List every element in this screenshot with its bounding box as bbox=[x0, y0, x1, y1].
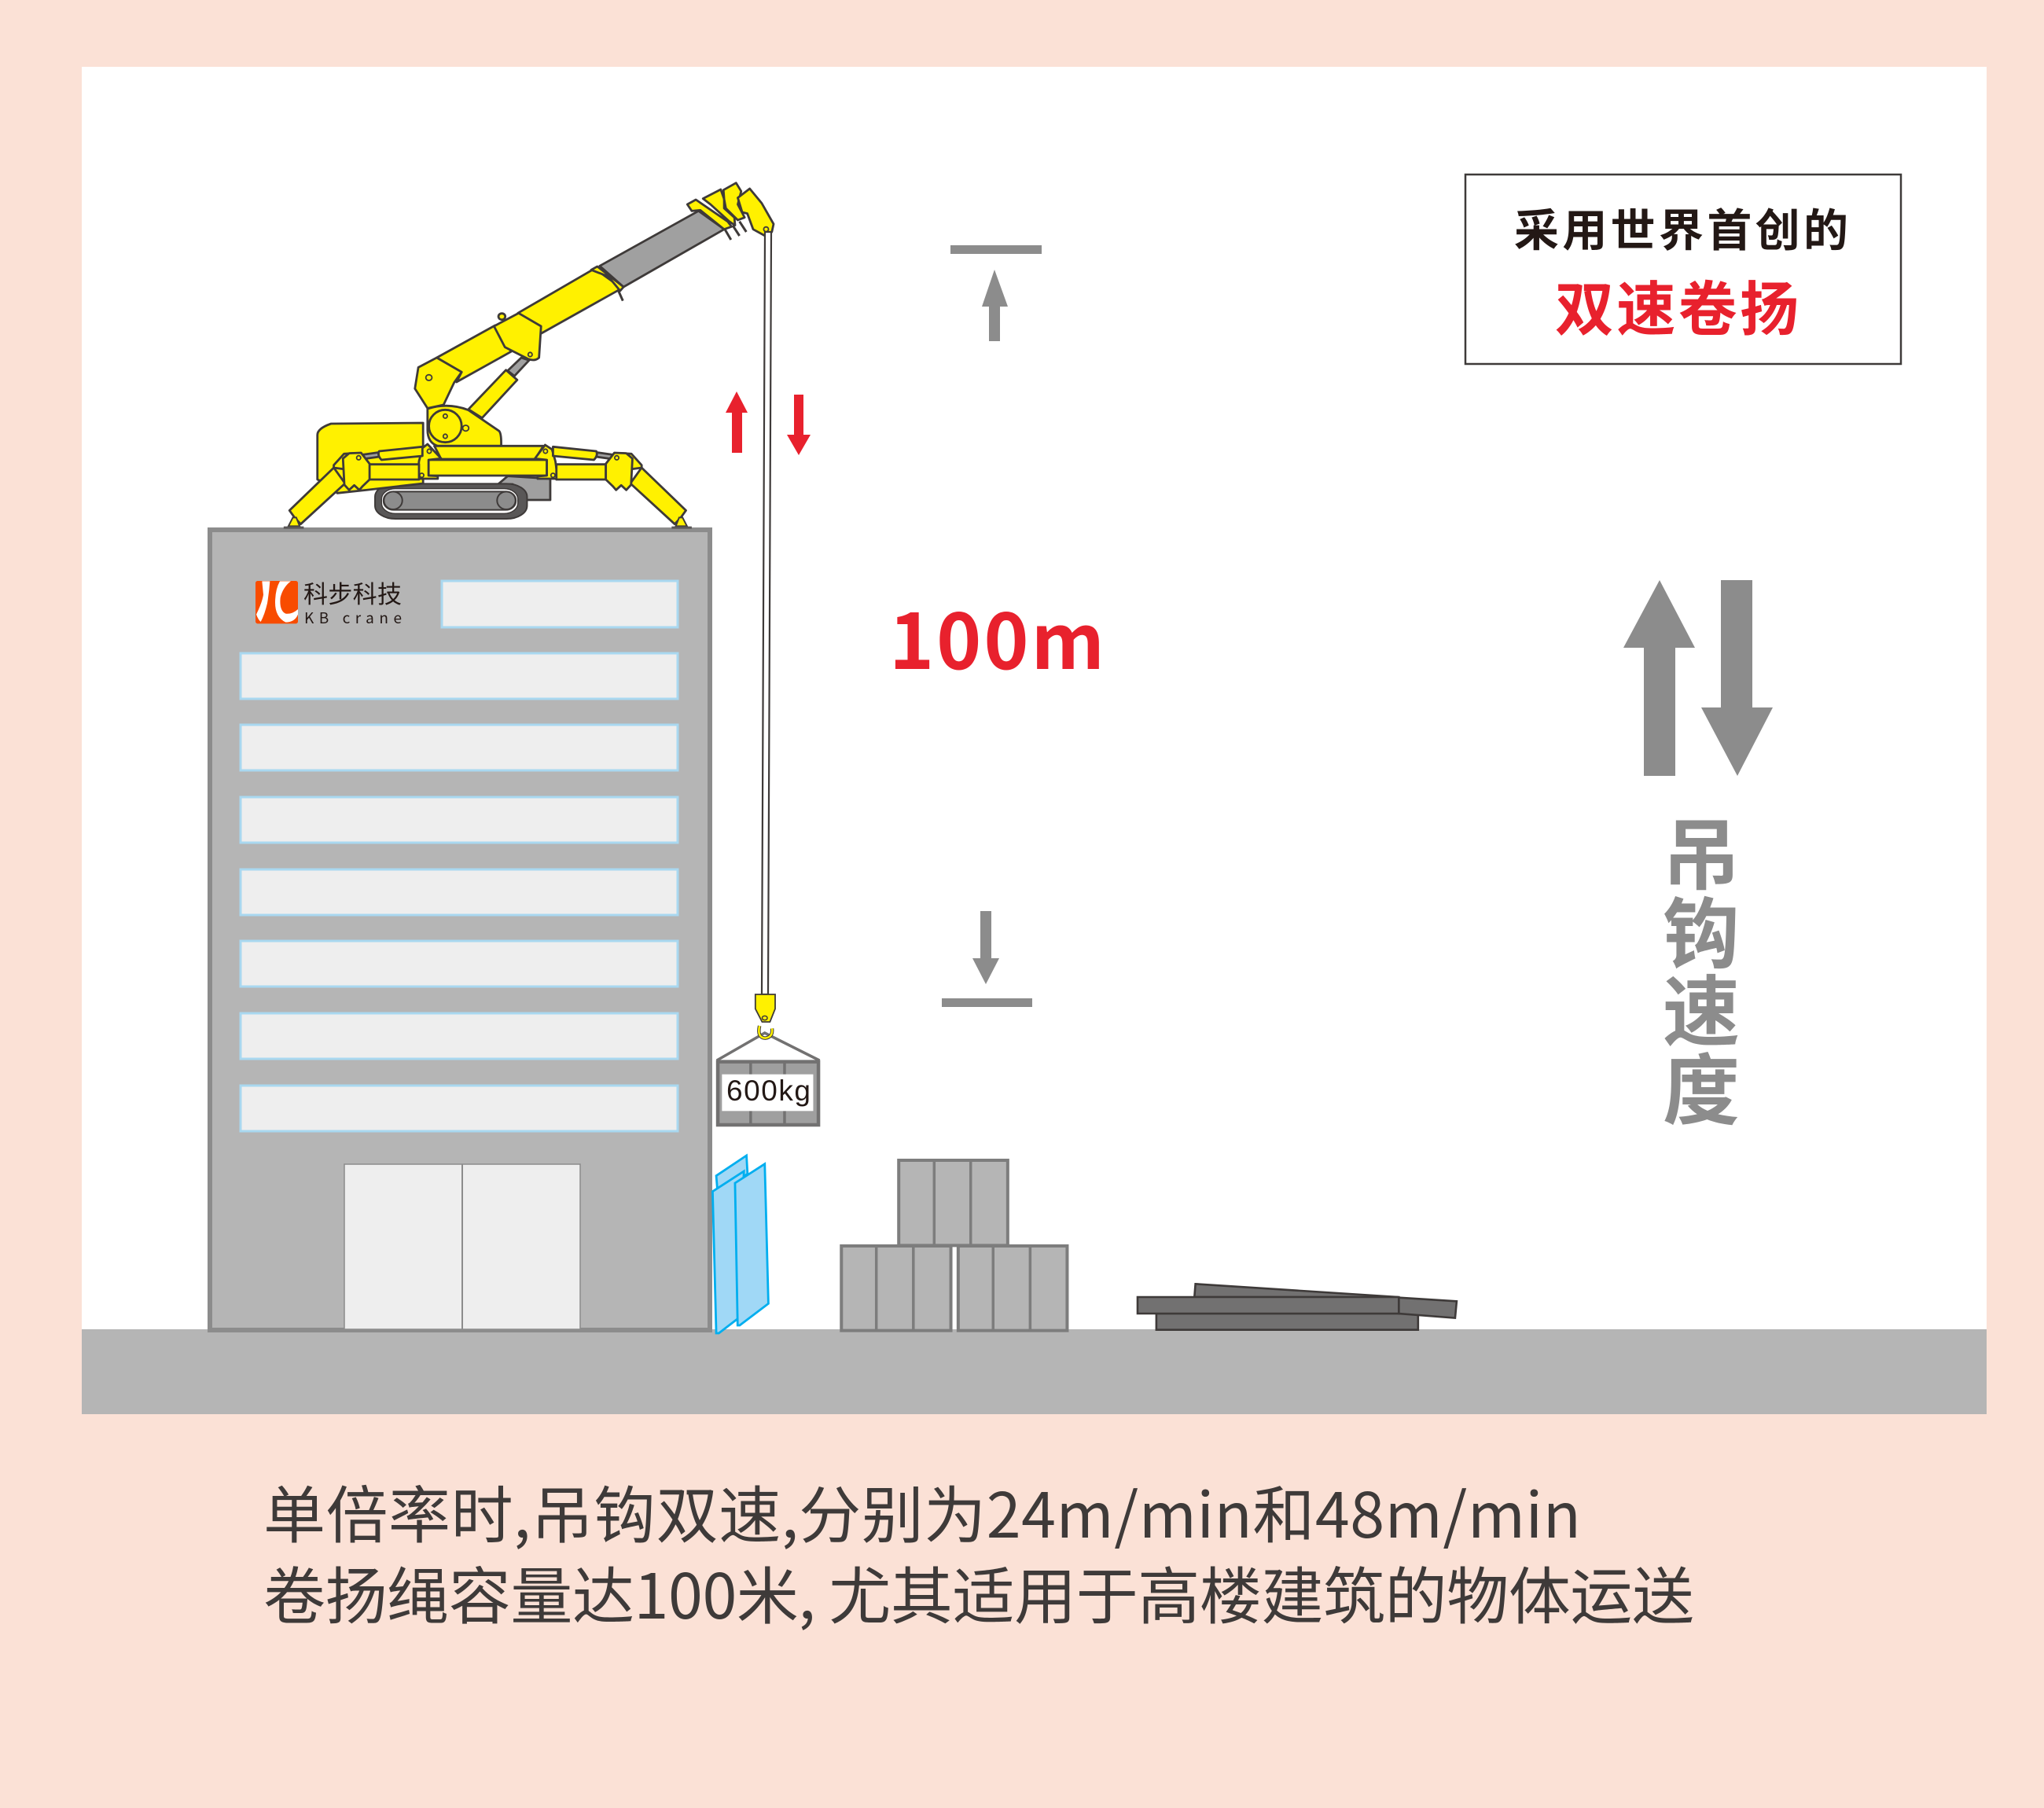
logo: KB crane: 科步科技 bbox=[303, 575, 402, 610]
vertical label: hook speed: 吊 bbox=[1663, 794, 1740, 906]
vertical label: hook speed: 速 bbox=[1663, 950, 1740, 1062]
callout: dual speed hoisting bbox=[1465, 175, 1901, 364]
glass panels bbox=[712, 1156, 768, 1333]
panel: white scene bbox=[82, 67, 1987, 1329]
crane boom bbox=[415, 211, 724, 408]
crane right outrigger bbox=[553, 446, 692, 529]
crane hook bbox=[755, 994, 775, 1038]
icon: large up and down arrows bbox=[1623, 580, 1773, 776]
caption text bbox=[263, 1465, 1694, 1637]
hook and load bbox=[717, 994, 819, 1125]
caption text: 卷扬绳容量达100米, 尤其适用于高楼建筑的物体运送 bbox=[263, 1546, 1694, 1637]
steel plates bbox=[1138, 1284, 1457, 1330]
crane luffing cylinder bbox=[469, 358, 529, 418]
ground bbox=[82, 1329, 1987, 1414]
hoist rope bbox=[762, 232, 771, 994]
dimension marker: top bbox=[950, 245, 1042, 341]
logo: KB crane: KB crane bbox=[304, 607, 402, 628]
callout: dual speed hoisting: 采用世界首创的 bbox=[1514, 195, 1848, 259]
crane left outrigger bbox=[284, 446, 422, 529]
dimension marker: bottom bbox=[942, 911, 1032, 1007]
vertical label: hook speed: 度 bbox=[1663, 1029, 1740, 1141]
crane track bbox=[375, 476, 550, 519]
crane boom tip bbox=[687, 183, 774, 240]
door bbox=[344, 1164, 580, 1329]
cargo boxes bbox=[841, 1160, 1067, 1331]
height label: 100m: 100m bbox=[889, 580, 1105, 691]
load weight label: 600kg bbox=[726, 1075, 811, 1107]
crane rear body bbox=[318, 423, 423, 493]
load crate bbox=[718, 1062, 818, 1125]
vertical label: hook speed: 钩 bbox=[1663, 873, 1740, 984]
logo: KB crane bbox=[256, 575, 402, 628]
crane chassis beam bbox=[417, 444, 557, 479]
callout: dual speed hoisting: 双速卷扬 bbox=[1555, 262, 1799, 347]
building bbox=[210, 530, 710, 1330]
caption text: 单倍率时,吊钩双速,分别为24m/min和48m/min bbox=[263, 1465, 1581, 1556]
crane bbox=[284, 183, 774, 529]
icon: red down arrow bbox=[787, 395, 811, 455]
crane turret bbox=[428, 406, 502, 446]
vertical label: hook speed bbox=[1663, 794, 1740, 1141]
icon: red up arrow bbox=[726, 391, 748, 453]
load sling bbox=[717, 1033, 819, 1060]
